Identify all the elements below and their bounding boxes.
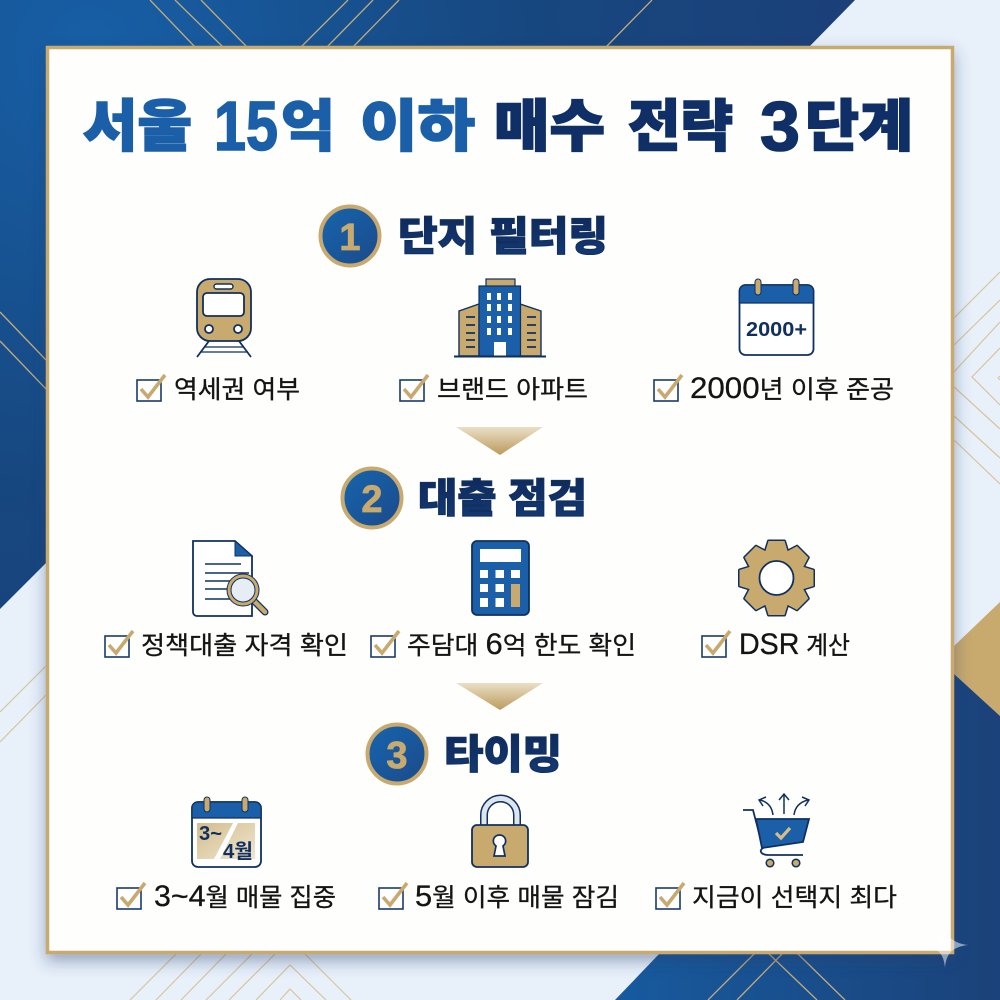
arrow: step 2 to 3 xyxy=(456,683,543,710)
step 2 heading xyxy=(342,468,587,528)
title: 전략 xyxy=(628,95,733,158)
section 2: 대출 점검 xyxy=(105,468,850,661)
icon: shopping cart with arrows xyxy=(743,794,809,867)
section 3: 타이밍 xyxy=(117,724,897,913)
sparkle xyxy=(922,922,968,968)
item: 주담대 6억 한도 확인: 주담대 6억 한도 확인 xyxy=(407,628,636,661)
item: 5월 이후 매물 잠김: 5월 이후 매물 잠김 xyxy=(415,880,619,913)
title xyxy=(83,87,913,165)
icon: train xyxy=(197,279,251,357)
item: 3~4월 매물 집중: 3~4월 매물 집중 xyxy=(154,880,336,913)
icon: calendar March to April: 3~ xyxy=(199,823,222,845)
icon: apartment building xyxy=(454,279,546,356)
title: 매수 xyxy=(494,95,605,158)
step 2 heading: 대출 점검 xyxy=(418,477,587,521)
icon: padlock xyxy=(472,798,528,867)
icon: calendar 2000+ xyxy=(740,279,814,355)
title: 억 xyxy=(281,95,335,158)
step 1 heading: 단지 필터링 xyxy=(398,215,608,259)
section 1: 단지 필터링 xyxy=(137,206,894,405)
item: 2000년 이후 준공: 2000년 이후 준공 xyxy=(690,372,894,405)
title: 단계 xyxy=(805,95,913,158)
step 3 heading xyxy=(368,724,562,784)
item: 역세권 여부: 역세권 여부 xyxy=(174,376,300,404)
title: 이하 xyxy=(360,95,475,158)
step 3 heading: 타이밍 xyxy=(444,733,562,777)
icon: document with magnifier xyxy=(193,541,265,616)
icon: gear xyxy=(740,541,814,615)
step 1 heading xyxy=(320,206,608,266)
title: 서울 xyxy=(83,95,192,158)
icon: calendar 2000+: 2000+ xyxy=(746,319,807,341)
step 1 heading: 1 xyxy=(339,217,361,259)
arrow: step 1 to 2 xyxy=(456,427,543,455)
item: 브랜드 아파트: 브랜드 아파트 xyxy=(437,376,588,404)
step 2 heading: 2 xyxy=(361,479,383,521)
icon: calendar March to April xyxy=(192,797,261,867)
item: DSR 계산: DSR 계산 xyxy=(739,628,850,661)
title: 3 xyxy=(760,87,800,165)
icon: calculator xyxy=(472,541,529,615)
item: 지금이 선택지 최다: 지금이 선택지 최다 xyxy=(692,884,897,912)
icon: calendar March to April: 4월 xyxy=(223,840,253,863)
item: 정책대출 자격 확인: 정책대출 자격 확인 xyxy=(141,632,348,660)
step 3 heading: 3 xyxy=(386,735,408,777)
title: 15 xyxy=(214,87,278,165)
